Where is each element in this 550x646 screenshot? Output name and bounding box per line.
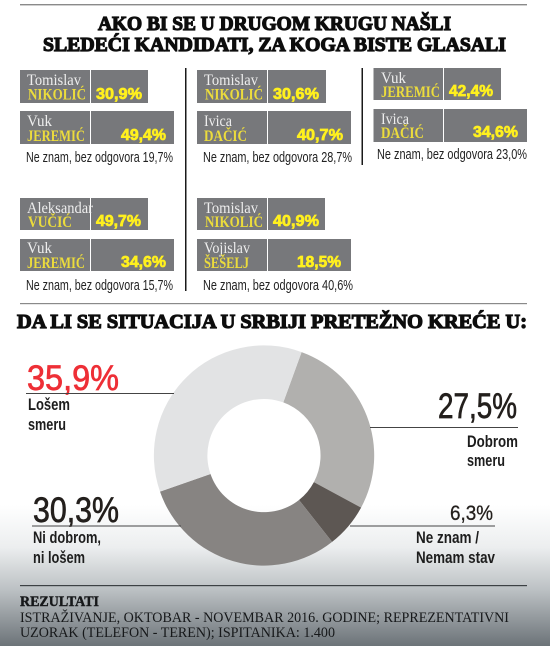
callout: don't know (350, 502, 496, 567)
callout: don't know: Nemam stav (416, 549, 496, 567)
panel: Nikolić vs Dačić: Ivica (204, 113, 232, 130)
panel: Nikolić vs Šešelj: ŠEŠELJ (204, 255, 249, 272)
panel: Nikolić vs Šešelj: 40,9% (273, 213, 319, 230)
panel: Nikolić vs Dačić: Ne znam, bez odgovora 28,7% (203, 150, 352, 166)
panel: Jeremić vs Dačić: JEREMIĆ (381, 84, 440, 101)
donut chart (154, 345, 374, 566)
panel: Nikolić vs Dačić: Tomislav (204, 72, 258, 89)
callout: good direction: Dobrom (467, 433, 518, 451)
panel: Nikolić vs Šešelj: NIKOLIĆ (205, 214, 263, 231)
callout: bad direction: Lošem (28, 396, 70, 414)
footer: methodology (20, 594, 509, 641)
panel: Nikolić vs Šešelj: 18,5% (297, 254, 341, 271)
panel: Jeremić vs Dačić: 34,6% (473, 124, 518, 141)
panel: Jeremić vs Dačić: Ivica (381, 111, 409, 128)
panel: Jeremić vs Dačić: 42,4% (449, 83, 493, 100)
callout: don't know: 6,3% (450, 502, 493, 525)
callout: bad direction: smeru (28, 416, 66, 434)
panel: Vučić vs Jeremić: 49,7% (96, 213, 141, 230)
callout: neither (32, 491, 181, 567)
panel: Nikolić vs Šešelj: Vojislav (204, 240, 250, 257)
panel: Jeremić vs Dačić: DAČIĆ (381, 125, 424, 142)
panel: Nikolić vs Šešelj (197, 198, 353, 294)
panel: Nikolić vs Dačić: 40,7% (297, 127, 343, 144)
footer: methodology: UZORAK (TELEFON - TEREN); ISPITANIKA: 1.400 (20, 625, 335, 641)
panel: Vučić vs Jeremić: Vuk (27, 240, 52, 257)
heading: direction question: DA LI SE SITUACIJA U SRBIJI PRETEŽNO KREĆE U: (17, 309, 527, 333)
panel: Nikolić vs Šešelj: Ne znam, bez odgovora 40,6% (203, 278, 353, 294)
panel: Nikolić vs Jeremić: Vuk (27, 113, 52, 130)
panel: Nikolić vs Dačić: DAČIĆ (204, 128, 247, 145)
panel: Nikolić vs Jeremić: Ne znam, bez odgovora 19,7% (26, 150, 173, 166)
title: runoff question: SLEDEĆI KANDIDATI, ZA KOGA BISTE GLASALI (43, 34, 506, 56)
title: runoff question (43, 13, 506, 56)
panel: Jeremić vs Dačić (374, 68, 527, 163)
panel: Nikolić vs Jeremić (20, 70, 174, 166)
callout: good direction (370, 387, 518, 470)
panel: Vučić vs Jeremić: Ne znam, bez odgovora 15,7% (26, 278, 173, 294)
panel: Nikolić vs Jeremić: 49,4% (121, 127, 166, 144)
panel: Nikolić vs Jeremić: JEREMIĆ (27, 128, 85, 145)
callout: neither: 30,3% (33, 491, 119, 530)
callout: neither: Ni dobrom, (33, 529, 101, 547)
panel: Nikolić vs Dačić: NIKOLIĆ (205, 86, 263, 104)
panel: Vučić vs Jeremić: 34,6% (121, 254, 166, 271)
footer: methodology: ISTRAŽIVANJE, OKTOBAR - NOVEMBAR 2016. GODINE; REPREZENTATIVNI (20, 609, 509, 626)
callout: bad direction: 35,9% (27, 359, 119, 398)
panel: Nikolić vs Dačić: 30,6% (273, 86, 319, 103)
callout: neither: ni lošem (33, 549, 85, 567)
footer: methodology: REZULTATI (20, 594, 99, 610)
panel: Jeremić vs Dačić: Vuk (381, 70, 406, 87)
panel: Nikolić vs Jeremić: 30,9% (96, 86, 142, 103)
panel: Nikolić vs Dačić (197, 70, 352, 166)
panel: Nikolić vs Šešelj: Tomislav (204, 200, 258, 217)
panel: Nikolić vs Jeremić: Tomislav (27, 72, 81, 89)
callout: bad direction (26, 359, 174, 434)
panel: Vučić vs Jeremić (20, 198, 174, 294)
panel: Nikolić vs Jeremić: NIKOLIĆ (28, 86, 86, 104)
panel: Vučić vs Jeremić: JEREMIĆ (27, 255, 85, 272)
callout: good direction: smeru (467, 452, 505, 470)
panel: Vučić vs Jeremić: VUČIĆ (28, 214, 72, 231)
panel: Vučić vs Jeremić: Aleksandar (27, 200, 94, 217)
callout: good direction: 27,5% (438, 387, 517, 426)
title: runoff question: AKO BI SE U DRUGOM KRUGU NAŠLI (98, 13, 451, 35)
callout: don't know: Ne znam / (416, 529, 479, 547)
